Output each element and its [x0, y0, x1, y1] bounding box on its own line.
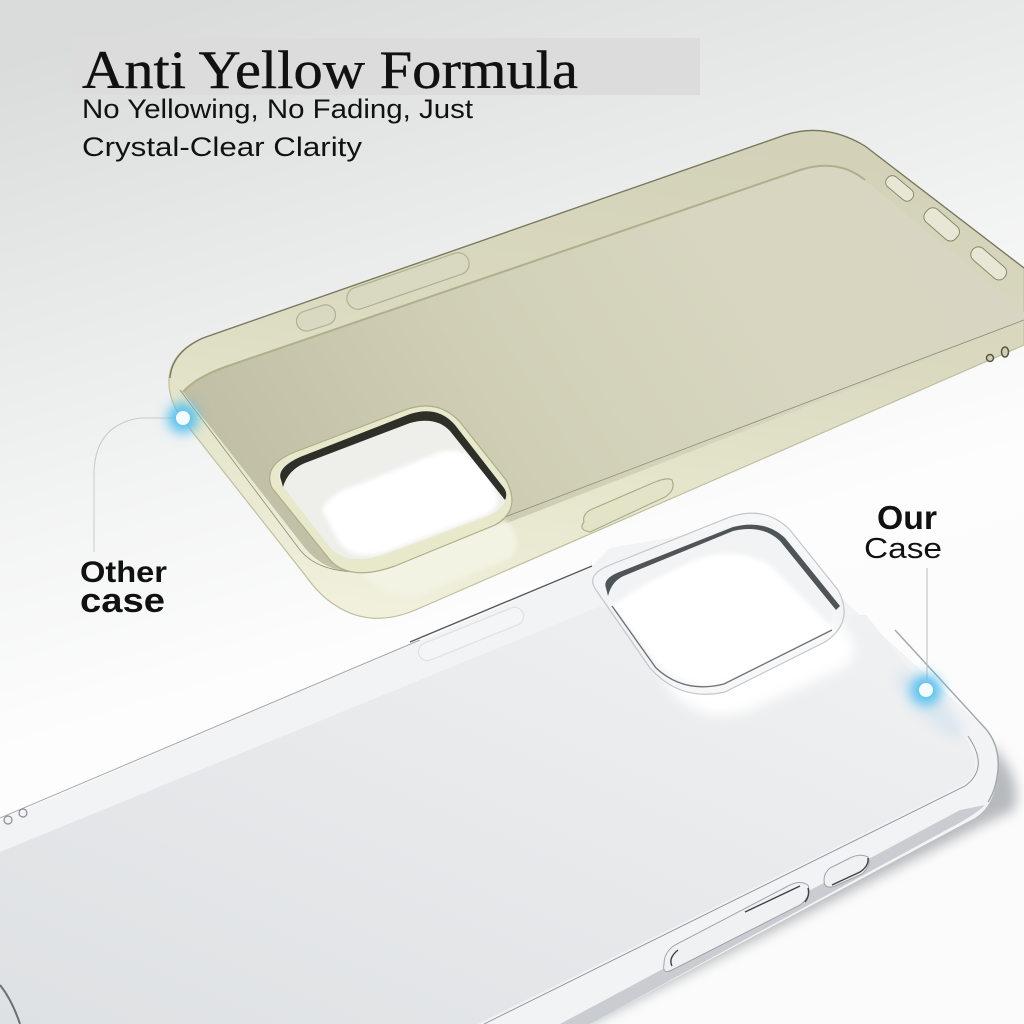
top left button openings — [294, 250, 472, 334]
panel: clear our case — [0, 513, 1016, 1024]
label: other case: case — [80, 582, 165, 620]
clear case body — [0, 520, 998, 1024]
floor edge line — [484, 736, 978, 1024]
camera opening interior — [612, 553, 835, 684]
camera top dark wall — [605, 525, 840, 610]
label: other case — [80, 556, 167, 620]
our case leader line — [926, 568, 928, 680]
camera hole white reflection — [322, 450, 498, 555]
label: our case: Our — [877, 499, 937, 536]
camera hole — [604, 525, 834, 682]
floor top crease — [183, 166, 865, 392]
white camera reflection — [632, 549, 855, 716]
subtitle: Crystal-Clear Clarity — [82, 132, 363, 162]
side button near centre — [416, 605, 526, 663]
title: Anti Yellow Formula — [82, 40, 578, 100]
clear case outer edge — [0, 640, 420, 818]
clear case lower shaded band — [560, 805, 985, 1024]
label: other case: Other — [80, 556, 167, 589]
yellow case top edge highlight — [170, 130, 1024, 378]
camera ring — [270, 406, 512, 573]
camera hole — [279, 413, 506, 559]
bottom side button — [582, 479, 673, 532]
right side button openings — [883, 173, 1009, 283]
our case dot — [919, 683, 933, 697]
other case dot — [176, 411, 190, 425]
camera dark inner wall — [280, 411, 506, 500]
panel: yellowed other case — [169, 130, 1024, 618]
camera glow patch — [360, 520, 516, 596]
subtitle: No Yellowing, No Fading, Just — [82, 94, 474, 124]
other case glow — [168, 403, 198, 433]
yellow case body — [169, 130, 1024, 618]
callout: other case pointer — [94, 403, 198, 552]
camera ring — [593, 513, 844, 694]
title band — [72, 38, 700, 95]
label: our case — [864, 499, 942, 565]
speaker holes — [986, 347, 1008, 362]
lower side buttons — [664, 855, 869, 972]
yellow case floor — [183, 166, 1024, 572]
lens holes — [4, 809, 27, 824]
right rim outer edge — [895, 630, 998, 802]
subtitle — [82, 94, 474, 162]
left corner edge — [0, 985, 20, 1024]
floor edge line — [180, 320, 1024, 572]
our case glow — [911, 675, 941, 705]
other case leader line — [94, 418, 175, 552]
callout: our case pointer — [911, 568, 941, 705]
rim blue tint — [890, 665, 970, 745]
camera lower edge — [612, 606, 832, 687]
shadow under clear case — [565, 745, 1016, 1024]
clear case floor — [0, 607, 975, 1024]
clear case dark edge accent — [410, 566, 592, 642]
lower button dark accents — [671, 858, 868, 966]
label: our case: Case — [864, 533, 942, 565]
